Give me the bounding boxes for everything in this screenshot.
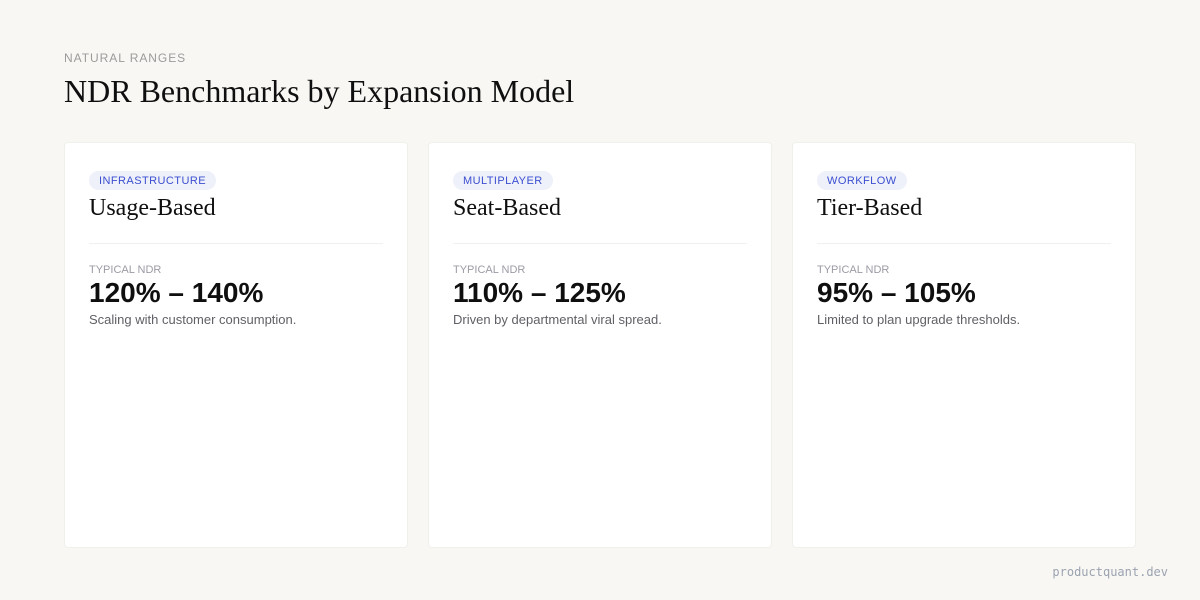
value: tier-based range: 95% – 105%	[817, 277, 976, 308]
card heading: tier-based: Tier-Based	[817, 195, 922, 221]
label: typical NDR: TYPICAL NDR	[817, 264, 889, 276]
tag: infrastructure: INFRASTRUCTURE	[99, 175, 206, 187]
tag: multiplayer	[453, 171, 553, 190]
panel: usage-based	[64, 142, 408, 548]
value: usage-based range: 120% – 140%	[89, 277, 263, 308]
tag: infrastructure	[89, 171, 216, 190]
card heading: seat-based: Seat-Based	[453, 195, 561, 221]
eyebrow label: NATURAL RANGES	[64, 51, 186, 65]
description: tier-based: Limited to plan upgrade thresholds.	[817, 312, 1020, 327]
panel: tier-based	[792, 142, 1136, 548]
tag: multiplayer: MULTIPLAYER	[463, 175, 543, 187]
tag: workflow: WORKFLOW	[827, 175, 897, 187]
tag: workflow	[817, 171, 907, 190]
title: NDR Benchmarks by Expansion Model	[64, 73, 574, 109]
card heading: usage-based: Usage-Based	[89, 195, 216, 221]
label: typical NDR: TYPICAL NDR	[89, 264, 161, 276]
value: seat-based range: 110% – 125%	[453, 277, 626, 308]
description: usage-based: Scaling with customer consumption.	[89, 312, 296, 327]
panel: seat-based	[428, 142, 772, 548]
description: seat-based: Driven by departmental viral spread.	[453, 312, 662, 327]
footer: source: productquant.dev	[1052, 565, 1168, 579]
label: typical NDR: TYPICAL NDR	[453, 264, 525, 276]
